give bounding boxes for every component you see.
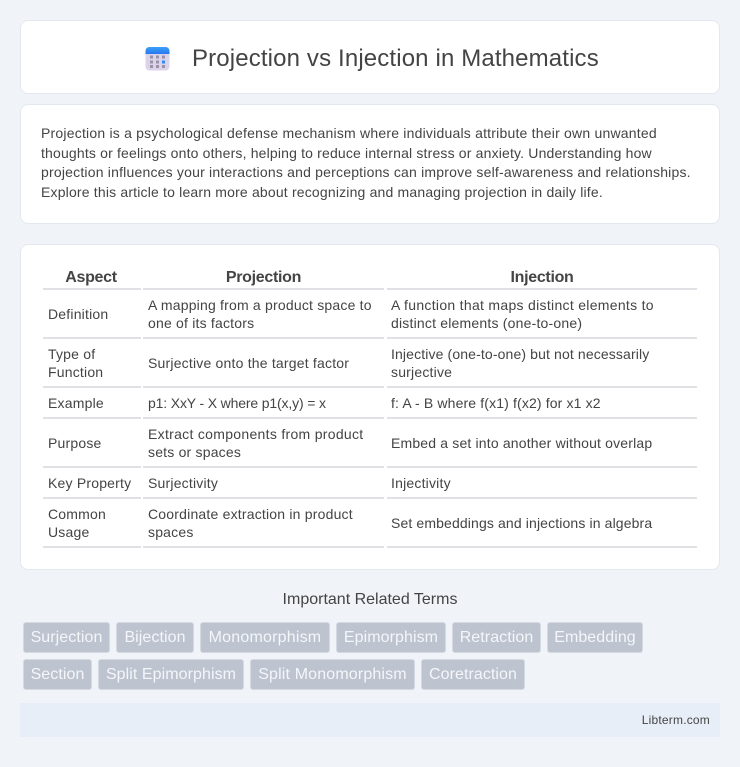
tag list: related terms: Embedding <box>554 629 636 646</box>
table row: type of function: Type of <box>48 346 95 362</box>
table header row: Projection <box>226 269 301 286</box>
text block: introduction <box>41 125 691 200</box>
table header row: Aspect <box>65 269 117 286</box>
table row: common usage: spaces <box>148 524 194 540</box>
table row: example: f: A - B where f(x1) f(x2) for x1 x2 <box>391 395 601 411</box>
table row: purpose: Embed a set into another without overlap <box>391 435 652 451</box>
table row: type of function: Injective (one-to-one) but not necessarily <box>391 346 649 362</box>
table row: common usage <box>48 506 652 540</box>
table row: definition: one of its factors <box>148 315 254 331</box>
table row: common usage: Coordinate extraction in product <box>148 506 353 522</box>
table row: purpose: sets or spaces <box>148 444 241 460</box>
text block: introduction: thoughts or feelings onto others, helping to reduce internal stress or anxiety. Understanding how <box>41 144 652 160</box>
footer source text: Libterm.com <box>642 713 710 727</box>
text block: introduction: Projection is a psychological defense mechanism where individuals attribute their own unwanted <box>41 125 657 141</box>
table row: key property <box>48 475 451 491</box>
table row: example <box>48 395 601 411</box>
table row: key property: Surjectivity <box>148 475 218 491</box>
table row: example: Example <box>48 395 104 411</box>
table row: definition: Definition <box>48 306 108 322</box>
table row: example: p1: XxY - X where p1(x,y) = x <box>148 395 326 411</box>
tag list: related terms <box>23 622 643 690</box>
tag list: related terms: Retraction <box>460 629 533 646</box>
tag list: related terms: Surjection <box>31 629 102 646</box>
table header row <box>65 269 574 286</box>
heading: important related terms: Important Related Terms <box>283 591 457 608</box>
table row: key property: Injectivity <box>391 475 451 491</box>
table row: common usage: Usage <box>48 524 89 540</box>
panel: title header <box>20 20 720 94</box>
table row: key property: Key Property <box>48 475 131 491</box>
table row: type of function: Function <box>48 364 103 380</box>
tag list: related terms: Split Monomorphism <box>258 666 407 683</box>
table row: definition <box>48 297 654 331</box>
table row: purpose <box>48 426 652 460</box>
tag list: related terms: Bijection <box>124 629 186 646</box>
tag list: related terms: Epimorphism <box>344 629 438 646</box>
table row: definition: distinct elements (one-to-one) <box>391 315 582 331</box>
tag list: related terms: Monomorphism <box>209 629 321 646</box>
tag list: related terms: Split Epimorphism <box>106 666 236 683</box>
icon: calendar app <box>146 47 170 70</box>
table row: common usage: Set embeddings and injections in algebra <box>391 515 652 531</box>
table row: purpose: Purpose <box>48 435 102 451</box>
footer bar <box>20 703 720 737</box>
panel: comparison table <box>20 244 720 570</box>
table row: purpose: Extract components from product <box>148 426 364 442</box>
table row: type of function <box>48 346 650 380</box>
tag list: related terms: Coretraction <box>429 666 517 683</box>
text block: introduction: Explore this article to learn more about recognizing and managing projection in daily life. <box>41 184 603 200</box>
table header row: Injection <box>510 269 574 286</box>
table row: definition: A mapping from a product space to <box>148 297 372 313</box>
text block: introduction: projection influences your interactions and perceptions can improve self-awareness and relationships. <box>41 164 691 180</box>
table row: type of function: surjective <box>391 364 452 380</box>
title: Projection vs Injection in Mathematics <box>192 45 599 72</box>
panel: introduction <box>20 104 720 224</box>
table row: definition: A function that maps distinct elements to <box>391 297 654 313</box>
table row: common usage: Common <box>48 506 106 522</box>
table row: type of function: Surjective onto the target factor <box>148 355 349 371</box>
tag list: related terms: Section <box>31 666 84 683</box>
